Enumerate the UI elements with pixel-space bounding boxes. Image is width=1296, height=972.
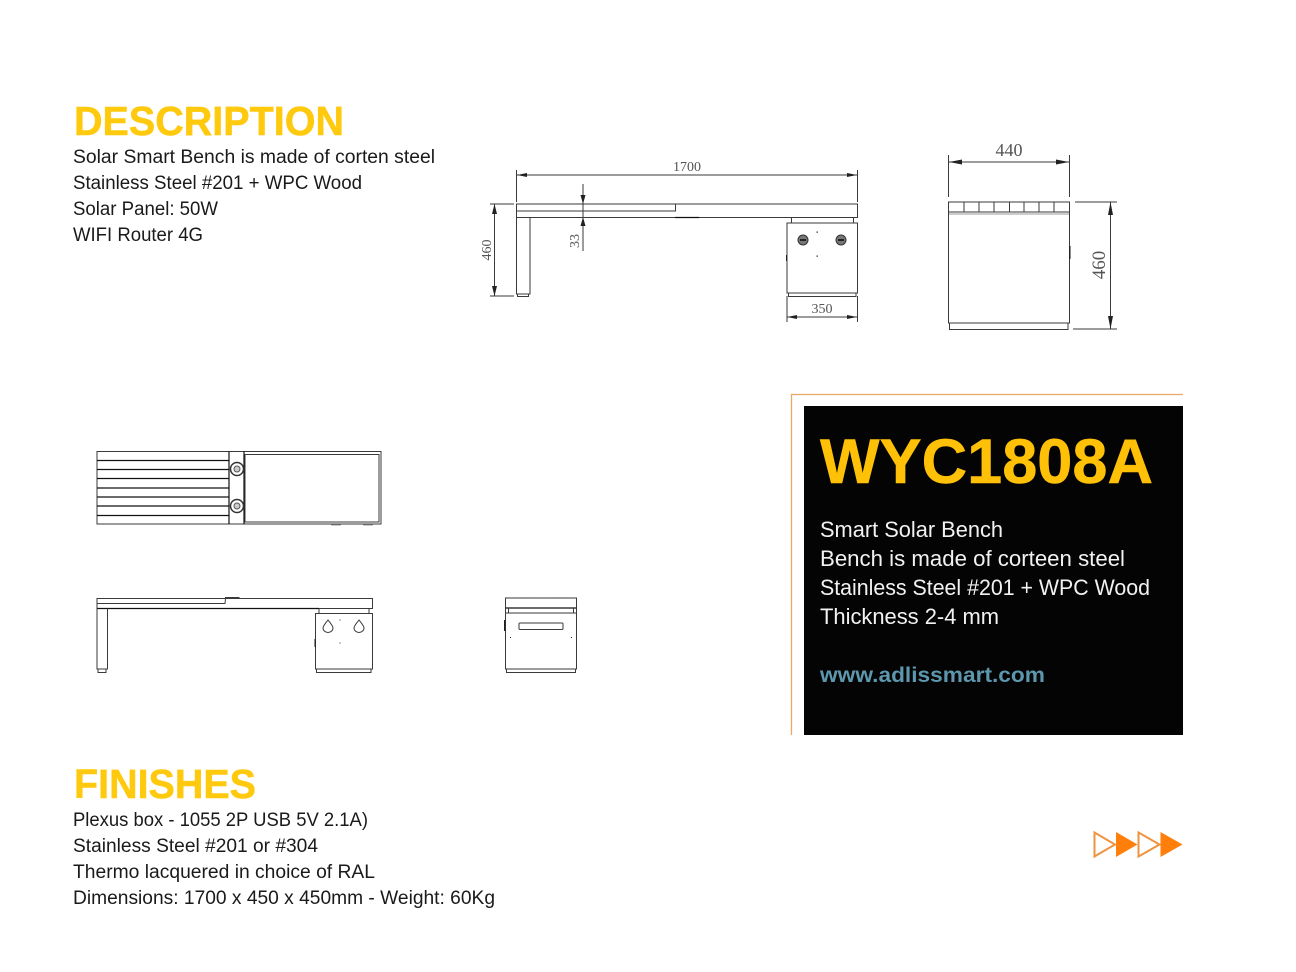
- black panel: [804, 406, 1183, 735]
- technical drawing: dimensioned side view: [948, 140, 1117, 330]
- text block: finishes details: Dimensions: 1700 x 450 x 450mm - Weight: 60Kg: [73, 888, 495, 909]
- top view port upper: [230, 462, 244, 476]
- dimension: 440 width: [948, 140, 1070, 197]
- dimension: 440 width: 440: [996, 140, 1022, 160]
- dimension: 350 depth: [787, 296, 858, 322]
- dimension: 460 height: [480, 204, 514, 296]
- website link: www.adlissmart.com: [819, 663, 1045, 687]
- text block: description details: Solar Panel: 50W: [73, 199, 218, 220]
- dimension: 33 thickness: 33: [568, 234, 583, 248]
- technical drawing: front view: [97, 598, 372, 672]
- bench leg: [516, 218, 530, 296]
- dimension: 350 depth: 350: [812, 302, 832, 317]
- dimension: 460 height: 460: [480, 240, 495, 260]
- technical drawing: dimensioned front view: [480, 160, 858, 322]
- dimension: 460 height: 460: [1089, 251, 1110, 279]
- side view slot: [519, 623, 563, 630]
- heading: finishes: FINISHES: [74, 761, 256, 807]
- panel: product card: [792, 394, 1183, 735]
- technical drawing: top view: [97, 452, 381, 525]
- front view drop right: [354, 620, 364, 632]
- text block: finishes details: Stainless Steel #201 or #304: [73, 836, 318, 857]
- product description: Bench is made of corteen steel: [820, 546, 1125, 571]
- front view leg: [97, 608, 108, 672]
- orange frame: [792, 394, 1183, 735]
- bench storage box: [786, 218, 858, 296]
- heading: description: DESCRIPTION: [74, 98, 344, 144]
- icon: orange arrows: [1094, 832, 1182, 857]
- dimension: 33 thickness: [568, 184, 586, 251]
- text block: description details: [73, 147, 435, 246]
- USB port left: [798, 235, 808, 245]
- top view port lower: [230, 500, 244, 512]
- dimension: 1700 width: [516, 160, 858, 202]
- product description: Stainless Steel #201 + WPC Wood: [820, 575, 1150, 600]
- product description: Thickness 2-4 mm: [820, 604, 999, 629]
- text block: description details: WIFI Router 4G: [73, 225, 203, 246]
- text block: finishes details: Plexus box - 1055 2P USB 5V 2.1A): [73, 810, 368, 831]
- product description: Smart Solar Bench: [820, 517, 1003, 542]
- USB port right: [836, 235, 846, 245]
- dimension: 460 height: [1073, 202, 1117, 329]
- text block: finishes details: Thermo lacquered in choice of RAL: [73, 862, 375, 883]
- side body: [948, 202, 1070, 330]
- front view drop left: [323, 620, 333, 632]
- text block: description details: Solar Smart Bench is made of corten steel: [73, 147, 435, 168]
- technical drawing: side view: [504, 598, 576, 672]
- product code: WYC1808A: [820, 427, 1153, 497]
- dimension: 1700 width: 1700: [673, 160, 701, 175]
- front view box: [314, 608, 372, 672]
- text block: finishes details: [73, 810, 495, 909]
- front view seat: [97, 598, 372, 608]
- text block: description details: Stainless Steel #201 + WPC Wood: [73, 173, 362, 194]
- bench seat: [516, 204, 858, 218]
- product description: [820, 517, 1150, 629]
